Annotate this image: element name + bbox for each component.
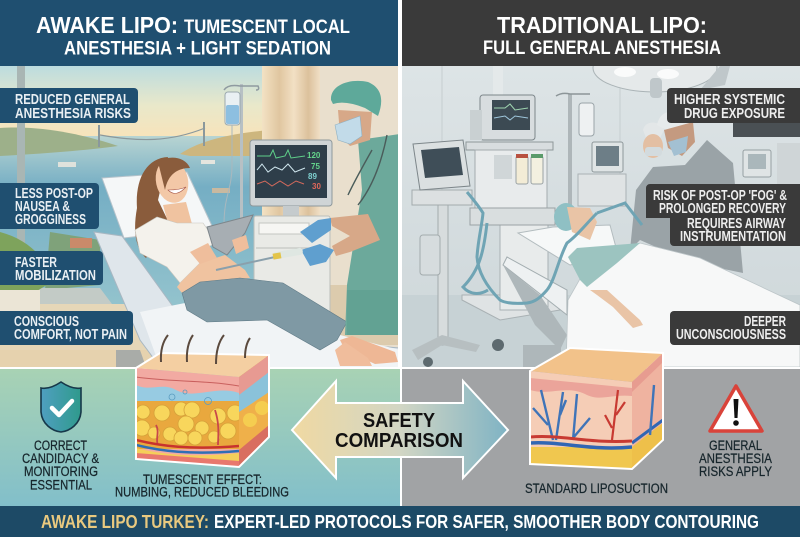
callout: reduced general anesthesia risks: ANESTHESIA RISKS	[15, 106, 131, 122]
anesthesia machine	[462, 95, 560, 320]
header: awake lipo: AWAKE LIPO:	[36, 12, 178, 38]
breathing circuit tubes	[463, 192, 642, 303]
callout: reduced general anesthesia risks	[0, 88, 138, 123]
cannula	[216, 247, 303, 270]
caption: tumescent effect: NUMBING, REDUCED BLEEDING	[115, 484, 289, 500]
callout: faster mobilization: FASTER	[15, 255, 57, 271]
callout: less post-op nausea: GROGGINESS	[15, 212, 86, 228]
text: general anesthesia risks: ANESTHESIA	[699, 451, 772, 466]
treatment chair	[94, 172, 400, 367]
panel: bottom left tumescent	[0, 369, 400, 506]
callout: conscious comfort	[0, 311, 133, 345]
callout: conscious comfort: COMFORT, NOT PAIN	[14, 327, 127, 343]
vital signs monitor	[250, 140, 332, 218]
text: correct candidacy	[22, 438, 99, 492]
patient under anesthesia	[554, 203, 800, 367]
surgical light	[592, 66, 730, 98]
header: awake lipo	[0, 0, 398, 66]
callout: less post-op nausea: NAUSEA &	[15, 199, 70, 215]
background monitor	[578, 142, 626, 206]
callout: less post-op nausea	[0, 183, 99, 229]
footer banner: AWAKE LIPO TURKEY:	[41, 511, 209, 532]
header: traditional lipo: TRADITIONAL LIPO:	[497, 12, 707, 38]
IV pole and bag	[224, 84, 259, 234]
footer banner	[0, 506, 800, 537]
tablet and hands	[190, 215, 253, 264]
text: general anesthesia risks: GENERAL	[709, 438, 762, 453]
caption: tumescent effect	[115, 472, 289, 500]
arrow: double safety comparison arrow	[292, 381, 508, 478]
header: awake lipo: TUMESCENT LOCAL	[184, 16, 350, 38]
text: safety comparison: COMPARISON	[335, 429, 463, 452]
doctor	[300, 81, 400, 335]
wall monitors	[733, 120, 800, 187]
monitor readings: 120	[307, 151, 321, 160]
text: general anesthesia risks	[699, 438, 772, 479]
skin block: standard liposuction	[530, 348, 663, 471]
text: safety comparison: SAFETY	[363, 409, 435, 432]
IV stand and bag	[556, 93, 594, 209]
panel: bottom right standard	[402, 369, 800, 506]
equipment cart	[254, 216, 330, 312]
callout: less post-op nausea: LESS POST-OP	[15, 186, 93, 202]
wall and curtain	[0, 66, 400, 367]
callout: faster mobilization: MOBILIZATION	[15, 268, 96, 284]
text: safety comparison	[335, 409, 463, 452]
operating bed	[503, 225, 618, 367]
monitor readings: 89	[308, 172, 317, 181]
window view	[0, 66, 270, 352]
monitor readings: 75	[311, 162, 320, 171]
panel: awake lipo scene	[0, 66, 400, 367]
text: correct candidacy: CANDIDACY &	[22, 451, 99, 466]
surgeons	[630, 112, 743, 273]
text: correct candidacy: MONITORING	[24, 464, 98, 479]
callout: post-op fog and airway instrumentation	[646, 184, 800, 246]
patient	[135, 156, 398, 366]
text: general anesthesia risks: RISKS APPLY	[699, 464, 772, 479]
caption: tumescent effect: TUMESCENT EFFECT:	[143, 472, 262, 487]
header: awake lipo: ANESTHESIA + LIGHT SEDATION	[64, 38, 331, 60]
callout: faster mobilization	[0, 251, 103, 285]
callout: deeper unconsciousness	[670, 311, 800, 345]
caption: standard liposuction: STANDARD LIPOSUCTION	[525, 481, 668, 496]
monitor readings	[308, 152, 321, 189]
skin block: tumescent effect	[134, 335, 269, 470]
header: traditional lipo	[402, 0, 800, 66]
text: correct candidacy: ESSENTIAL	[30, 478, 92, 492]
panel: traditional lipo scene	[402, 44, 800, 367]
icon: warning triangle	[710, 386, 762, 431]
icon: safety shield	[41, 382, 81, 432]
header: traditional lipo: FULL GENERAL ANESTHESIA	[483, 37, 721, 59]
injection needles	[161, 335, 250, 364]
callout: higher systemic drug exposure	[667, 88, 800, 123]
text: correct candidacy: CORRECT	[34, 438, 87, 453]
left patient monitor on stand	[412, 140, 504, 367]
monitor readings: 30	[312, 182, 321, 191]
callout: conscious comfort: CONSCIOUS	[14, 314, 79, 330]
callout: reduced general anesthesia risks: REDUCED GENERAL	[15, 92, 130, 108]
operating room background	[402, 66, 800, 367]
